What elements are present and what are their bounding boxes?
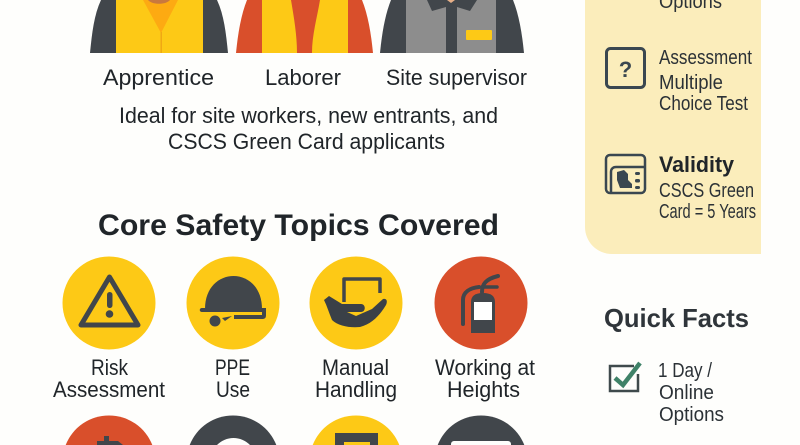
icon: checkbox xyxy=(610,363,640,391)
text: validity: Validity xyxy=(659,152,735,177)
heading: core safety topics: Core Safety Topics Covered xyxy=(98,209,499,242)
icon: question box xyxy=(606,48,644,88)
label: risk assessment xyxy=(53,355,165,402)
icon: bottom row dark panel xyxy=(438,415,524,445)
label: ppe use: Use xyxy=(216,377,250,402)
text: validity: CSCS Green xyxy=(659,180,754,202)
text: duration: Online xyxy=(659,382,714,404)
panel: safety topics xyxy=(53,256,535,445)
label: risk assessment: Risk xyxy=(91,355,129,380)
icon: id card xyxy=(606,155,645,193)
icon: risk assessment warning triangle xyxy=(62,256,156,350)
icon: question box: ? xyxy=(619,57,632,82)
label: apprentice: Apprentice xyxy=(103,65,214,90)
audience description: Ideal for site workers, new entrants, and xyxy=(119,103,498,128)
text: assessment xyxy=(659,47,752,115)
figure: laborer xyxy=(236,0,373,53)
panel: audience xyxy=(90,0,527,154)
panel background xyxy=(585,0,761,254)
label: ppe use xyxy=(215,355,250,402)
text: validity: Card = 5 Years xyxy=(659,201,756,223)
figure: site supervisor xyxy=(380,0,524,53)
label: laborer: Laborer xyxy=(265,65,341,90)
label: ppe use: PPE xyxy=(215,355,250,380)
audience description: CSCS Green Card applicants xyxy=(168,129,445,154)
label: manual handling: Handling xyxy=(315,377,397,402)
text: assessment: Choice Test xyxy=(659,93,748,115)
panel: course details xyxy=(585,0,761,254)
icon: bottom row yellow xyxy=(313,415,399,445)
label: working at heights xyxy=(435,355,535,402)
text: duration xyxy=(658,360,724,426)
label: risk assessment: Assessment xyxy=(53,377,165,402)
icon: manual handling xyxy=(310,256,402,350)
label: site supervisor: Site supervisor xyxy=(386,65,527,90)
text: duration: 1 Day / xyxy=(658,360,712,382)
icon: bottom row dark xyxy=(190,415,276,445)
text: assessment: Multiple xyxy=(659,72,723,94)
audience description xyxy=(119,103,498,154)
panel: quick facts xyxy=(604,303,749,426)
heading: quick facts: Quick Facts xyxy=(604,303,749,333)
icon: hard hat xyxy=(186,256,280,350)
icon: bottom row red xyxy=(66,415,152,445)
label: working at heights: Heights xyxy=(447,377,520,402)
figure: apprentice xyxy=(90,0,228,53)
label: working at heights: Working at xyxy=(435,355,535,380)
text: assessment: Assessment xyxy=(659,47,752,69)
text: validity xyxy=(659,152,756,223)
label: manual handling xyxy=(315,355,397,402)
icon: fire extinguisher xyxy=(434,256,528,350)
text: duration: Options xyxy=(659,404,724,426)
label: manual handling: Manual xyxy=(322,355,389,380)
